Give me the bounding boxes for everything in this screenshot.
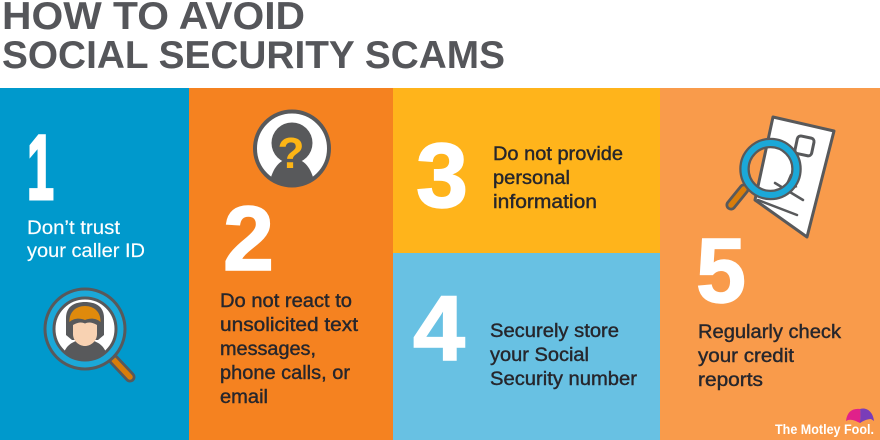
- step 3 text: personal: [493, 168, 570, 189]
- step 5 text: [698, 322, 842, 391]
- icon: magnifying glass over document: [731, 117, 834, 237]
- number 3: 3: [416, 125, 468, 227]
- step 4 text: Securely store: [490, 321, 619, 342]
- step 1 text: your caller ID: [27, 241, 145, 262]
- step 2 text: Do not react to: [220, 291, 352, 312]
- panel: step 5 credit reports: [660, 88, 880, 440]
- step 2 text: [220, 291, 359, 408]
- step 4 text: [490, 321, 638, 390]
- icon: magnifying glass over person: [45, 289, 130, 377]
- step 3 text: information: [493, 192, 597, 213]
- icon: anonymous person with question mark: ?: [278, 129, 304, 178]
- number 2: 2: [223, 188, 274, 290]
- step 5 text: your credit: [698, 346, 795, 367]
- step 1 text: [27, 218, 145, 262]
- panel: step 4 store number: [393, 253, 660, 440]
- number 5: 5: [696, 220, 746, 322]
- step 5 text: Regularly check: [698, 322, 842, 343]
- step 2 text: phone calls, or: [220, 363, 351, 384]
- panel: step 1 caller ID: [0, 88, 189, 440]
- step 2 text: email: [220, 387, 268, 408]
- icon: anonymous person with question mark: [255, 112, 329, 190]
- panel: step 2 unsolicited contact: [189, 88, 393, 440]
- title: SOCIAL SECURITY SCAMS: [2, 34, 505, 77]
- step 2 text: unsolicited text: [220, 315, 359, 336]
- title: [2, 0, 505, 77]
- panel: step 3 personal information: [393, 88, 660, 253]
- step 4 text: Security number: [490, 369, 638, 390]
- step 4 text: your Social: [490, 345, 589, 366]
- logo: The Motley Fool: [775, 409, 874, 437]
- number 1: 1: [27, 117, 54, 219]
- step 5 text: reports: [698, 370, 763, 391]
- step 1 text: Don’t trust: [27, 218, 121, 239]
- step 2 text: messages,: [220, 339, 316, 360]
- number 4: 4: [413, 278, 465, 380]
- step 3 text: Do not provide: [493, 144, 623, 165]
- step 3 text: [493, 144, 623, 213]
